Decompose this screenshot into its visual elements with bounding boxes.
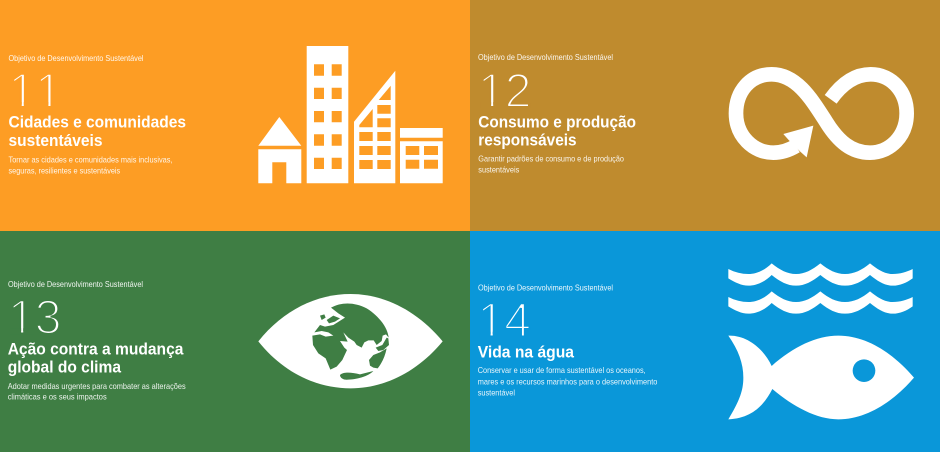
panel background blue [470, 231, 940, 452]
goal label: Objetivo de Desenvolvimento Sustentável [8, 279, 143, 289]
panel background orange [0, 0, 470, 231]
heading: Cidades e comunidades [8, 113, 186, 132]
description [8, 154, 172, 175]
description: sustentáveis [478, 165, 519, 175]
heading: Vida na água [478, 342, 574, 361]
description: sustentável [478, 387, 515, 397]
description: seguras, resilientes e sustentáveis [8, 165, 120, 175]
icon: infinity loop arrow [736, 74, 907, 157]
heading [8, 113, 186, 150]
panel: goal 12 [470, 0, 940, 231]
heading: global do clima [8, 358, 121, 377]
panel: goal 13 [0, 231, 470, 452]
goal label: Objetivo de Desenvolvimento Sustentável [478, 52, 613, 62]
panel background green [0, 231, 470, 452]
goal number: 11 [9, 65, 62, 118]
description: Tornar as cidades e comunidades mais inclusivas, [8, 154, 172, 164]
description [478, 154, 624, 175]
icon: eye with globe [258, 294, 443, 388]
icon: waves and fish [728, 263, 914, 419]
description: Garantir padrões de consumo e de produção [478, 154, 624, 164]
heading: sustentáveis [8, 131, 102, 150]
goal label: Objetivo de Desenvolvimento Sustentável [478, 282, 613, 292]
description [478, 365, 658, 397]
goal label: Objetivo de Desenvolvimento Sustentável [8, 53, 144, 63]
description: mares e os recursos marinhos para o desenvolvimento [478, 376, 658, 386]
heading: Consumo e produção [478, 112, 636, 131]
icon: city buildings [258, 46, 443, 183]
goal number: 13 [8, 291, 61, 344]
description [8, 381, 186, 402]
panel: goal 14 [470, 231, 940, 452]
heading [478, 112, 636, 149]
heading: responsáveis [478, 130, 577, 149]
goal number: 14 [478, 295, 531, 348]
description: climáticas e os seus impactos [8, 392, 107, 402]
panel background ochre [470, 0, 940, 231]
goal number: 12 [478, 65, 531, 118]
description: Adotar medidas urgentes para combater as alterações [8, 381, 186, 391]
heading: Ação contra a mudança [8, 339, 184, 358]
heading [8, 339, 184, 377]
panel: goal 11 [0, 0, 470, 231]
description: Conservar e usar de forma sustentável os oceanos, [478, 365, 646, 375]
